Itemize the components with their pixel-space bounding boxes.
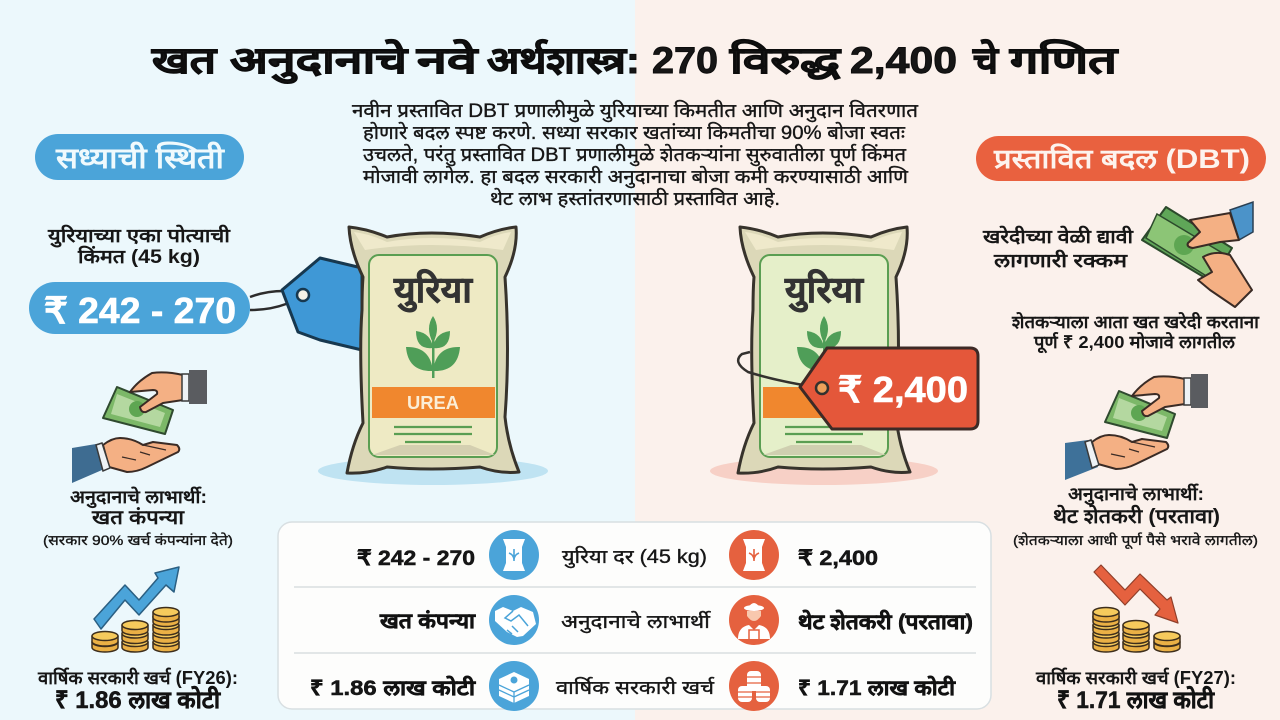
- coin stack medium: [1123, 620, 1149, 652]
- left beneficiary text: (सरकार 90% खर्च कंपन्यांना देते): [43, 532, 233, 548]
- icon: subsidy to farmer (right hands): [1065, 374, 1208, 480]
- right annual expenditure: [1035, 667, 1236, 714]
- coin stack large: [1093, 608, 1119, 652]
- left annual expenditure: ₹ 1.86 लाख कोटी: [55, 686, 221, 714]
- right label: amount at purchase: लागणारी रक्कम: [993, 249, 1128, 272]
- row: beneficiary: थेट शेतकरी (परतावा): [798, 609, 973, 634]
- right note: full amount: पूर्ण ₹ 2,400 मोजावे लागतील: [1033, 331, 1236, 354]
- right section pill: proposed change: प्रस्तावित बदल (DBT): [993, 143, 1250, 174]
- red price tag: ₹ 2,400: [838, 369, 968, 410]
- right label: amount at purchase: खरेदीच्या वेळी द्यावी: [982, 225, 1134, 248]
- right annual expenditure: वार्षिक सरकारी खर्च (FY27):: [1035, 667, 1236, 688]
- left urea bag: [318, 227, 548, 485]
- left label: price of one bag: किंमत (45 kg): [77, 245, 200, 268]
- left price pill: [29, 282, 250, 334]
- icon: subsidy to companies (left hands): [72, 370, 207, 483]
- plant emblem: [406, 316, 460, 378]
- coin stack medium: [122, 620, 148, 652]
- icon: hands exchanging cash: [1142, 202, 1253, 307]
- left price pill: ₹ 242 - 270: [44, 290, 236, 331]
- left section pill: current status: सध्याची स्थिती: [55, 141, 226, 175]
- row: urea rate: [357, 530, 878, 580]
- title: अनुदानाचे: [230, 39, 409, 84]
- row: annual expenditure: ₹ 1.71 लाख कोटी: [798, 675, 957, 700]
- intro paragraph: [352, 99, 919, 210]
- row: annual expenditure: वार्षिक सरकारी खर्च: [556, 676, 715, 699]
- intro paragraph: होणारे बदल स्पष्ट करणे. सध्या सरकार खतांच्या किमतीचा 90% बोजा स्वतः: [363, 121, 906, 144]
- left beneficiary text: खत कंपन्या: [91, 507, 185, 529]
- right beneficiary text: अनुदानाचे लाभार्थी:: [1068, 483, 1204, 506]
- red price tag: [738, 348, 978, 429]
- right label: amount at purchase: [982, 225, 1134, 272]
- icon: bag red: [729, 530, 779, 580]
- left beneficiary text: [43, 486, 233, 548]
- title: खत: [151, 40, 218, 81]
- row: urea rate: ₹ 242 - 270: [357, 547, 475, 570]
- left annual expenditure: [37, 667, 238, 714]
- icon: coin stacks: [729, 661, 779, 711]
- left urea bag: UREA: [407, 393, 459, 413]
- icon: handshake: [489, 595, 539, 645]
- row: urea rate: ₹ 2,400: [798, 547, 878, 570]
- right urea bag: युरिया: [784, 269, 865, 313]
- row: urea rate: युरिया दर (45 kg): [562, 545, 707, 569]
- title: नवे: [416, 39, 479, 81]
- intro paragraph: उचलते, परंतु प्रस्तावित DBT प्रणालीमुळे शेतकऱ्यांना सुरुवातीला पूर्ण किंमत: [363, 143, 907, 167]
- coin stack small: [1154, 632, 1180, 652]
- title: [151, 39, 1120, 84]
- right beneficiary text: (शेतकऱ्याला आधी पूर्ण पैसे भरावे लागतील): [1013, 532, 1258, 549]
- row: beneficiary: अनुदानाचे लाभार्थी: [561, 610, 711, 634]
- icon: bag blue: [489, 530, 539, 580]
- intro paragraph: नवीन प्रस्तावित DBT प्रणालीमुळे युरियाच्या किमतीत आणि अनुदान वितरणात: [352, 99, 919, 123]
- left beneficiary text: अनुदानाचे लाभार्थी:: [70, 486, 207, 509]
- intro paragraph: मोजावी लागेल. हा बदल सरकारी अनुदानाचा बोजा कमी करण्यासाठी आणि: [363, 165, 908, 189]
- icon: rising arrow over coins: [92, 567, 179, 652]
- right urea bag: [710, 227, 938, 485]
- right note: full amount: शेतकऱ्याला आता खत खरेदी करताना: [1011, 311, 1261, 332]
- left section pill: current status: [35, 134, 244, 180]
- intro paragraph: थेट लाभ हस्तांतरणासाठी प्रस्तावित आहे.: [490, 187, 780, 210]
- icon: falling arrow over coins: [1093, 565, 1180, 652]
- left label: price of one bag: [47, 224, 231, 268]
- title: 2,400: [850, 40, 957, 81]
- coin stack large: [153, 608, 179, 652]
- icon: farmer: [729, 595, 779, 645]
- title: विरुद्ध: [729, 39, 842, 81]
- right annual expenditure: ₹ 1.71 लाख कोटी: [1057, 686, 1215, 714]
- left urea bag: युरिया: [393, 269, 474, 313]
- left label: price of one bag: युरियाच्या एका पोत्याची: [47, 224, 231, 248]
- coin stack small: [92, 632, 118, 652]
- left annual expenditure: वार्षिक सरकारी खर्च (FY26):: [37, 667, 238, 688]
- title: गणित: [1009, 39, 1120, 81]
- plant emblem: [797, 316, 841, 378]
- right note: full amount: [1011, 311, 1261, 354]
- title: 270: [652, 40, 718, 81]
- right beneficiary text: थेट शेतकरी (परतावा): [1053, 504, 1220, 528]
- title: अर्थशास्त्र:: [487, 39, 640, 81]
- icon: money stack: [489, 661, 539, 711]
- row: beneficiary: [379, 595, 973, 645]
- blue price tag with string: [250, 258, 362, 350]
- row: annual expenditure: [310, 661, 957, 711]
- title: चे: [972, 39, 1000, 81]
- row: annual expenditure: ₹ 1.86 लाख कोटी: [310, 675, 477, 700]
- right beneficiary text: [1013, 483, 1258, 549]
- right section pill: proposed change: [976, 136, 1266, 181]
- comparison table panel: [278, 522, 991, 711]
- row: beneficiary: खत कंपन्या: [379, 610, 477, 633]
